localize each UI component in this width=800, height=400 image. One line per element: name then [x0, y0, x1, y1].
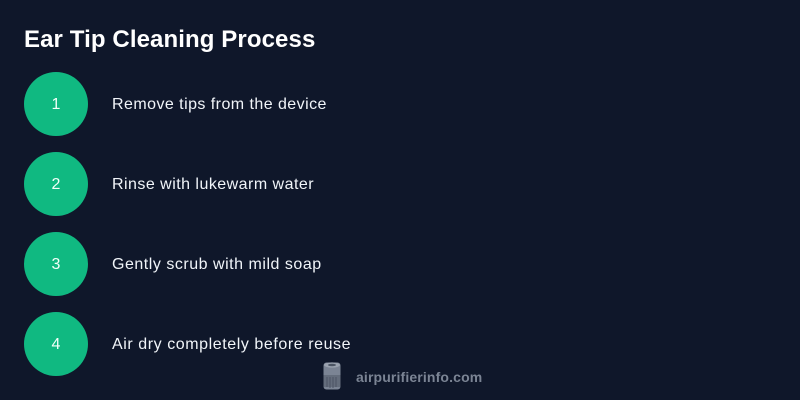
step 2 badge	[24, 152, 88, 216]
step 2 text: Rinse with lukewarm water	[112, 176, 314, 193]
step 1 badge: 1	[52, 96, 60, 113]
step 1 text: Remove tips from the device	[112, 96, 327, 113]
step 1 badge	[24, 72, 88, 136]
step 2 badge: 2	[52, 176, 60, 193]
step 3 badge: 3	[52, 256, 60, 273]
step 4 badge: 4	[52, 336, 60, 353]
step 3 badge	[24, 232, 88, 296]
step 3 text: Gently scrub with mild soap	[112, 256, 322, 273]
watermark text: airpurifierinfo.com	[356, 369, 482, 385]
title: Ear Tip Cleaning Process	[24, 26, 315, 53]
step 4 text: Air dry completely before reuse	[112, 336, 351, 353]
icon: air purifier	[324, 362, 340, 390]
step 4 badge	[24, 312, 88, 376]
